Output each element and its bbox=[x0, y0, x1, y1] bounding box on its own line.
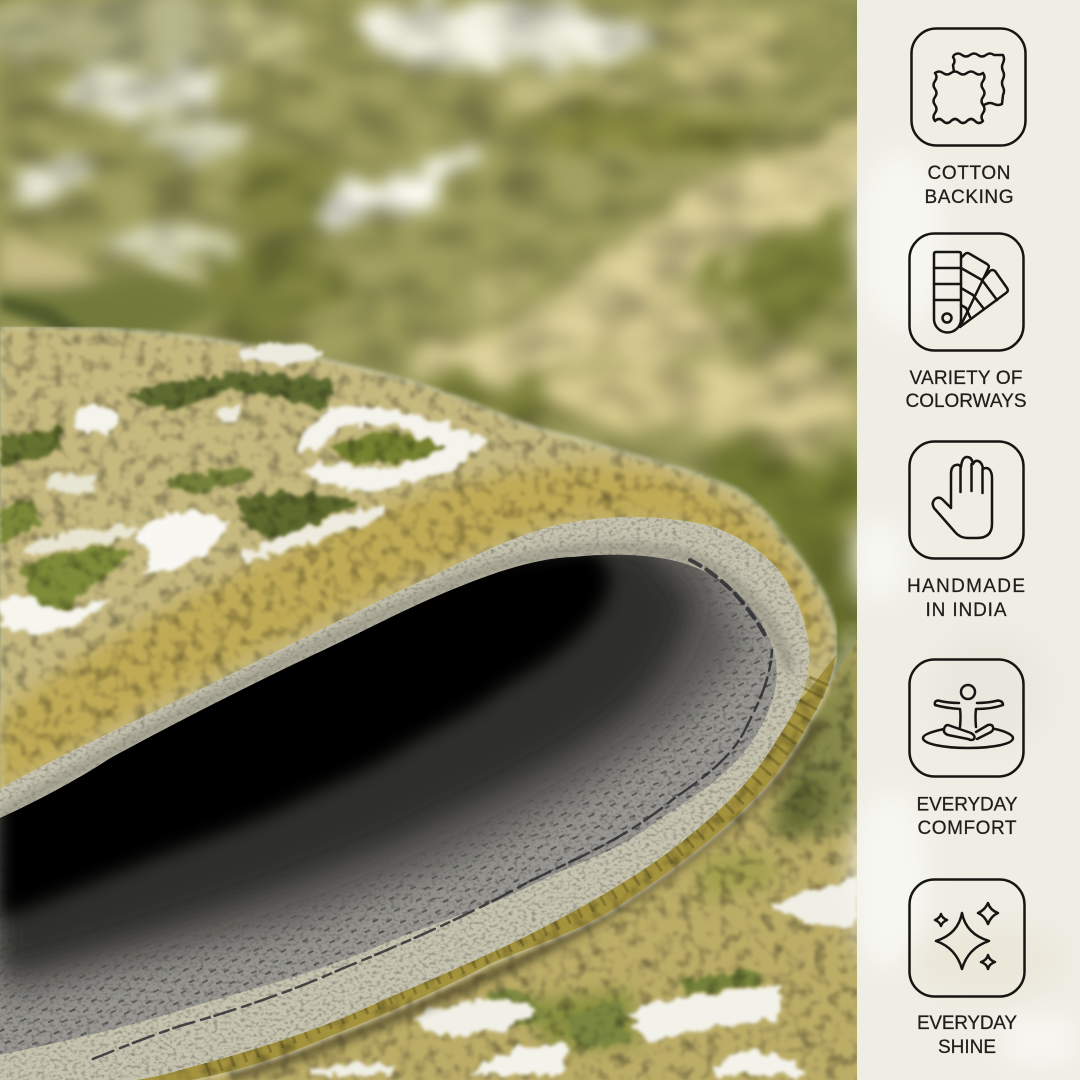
feature: variety of colorways bbox=[906, 234, 1026, 412]
feature: everyday comfort bbox=[910, 660, 1024, 839]
label: handmade in India: HANDMADE bbox=[907, 576, 1025, 597]
label: everyday shine: SHINE bbox=[938, 1037, 996, 1058]
feature: handmade in India bbox=[907, 442, 1025, 621]
label: handmade in India: IN INDIA bbox=[926, 600, 1007, 621]
white motif patches on roll bbox=[0, 343, 487, 635]
label: variety of colorways: COLORWAYS bbox=[906, 391, 1026, 412]
label: everyday shine bbox=[917, 1013, 1017, 1058]
label: handmade in India bbox=[907, 576, 1025, 621]
rug edge binding bbox=[0, 517, 809, 1080]
icon: sparkling stars bbox=[910, 880, 1024, 996]
feature: cotton backing bbox=[912, 28, 1026, 208]
shaded upper binding bbox=[0, 549, 790, 815]
panel: feature column background bbox=[855, 0, 1080, 1080]
dark weave fold in focus zone bbox=[0, 292, 84, 330]
label: cotton backing bbox=[924, 163, 1014, 208]
icon: raised hand bbox=[910, 442, 1024, 558]
hollow underside of the roll bbox=[0, 540, 800, 1080]
rug surface fading into focus bbox=[0, 229, 215, 336]
dark stitching along the binding bbox=[93, 560, 772, 1059]
label: everyday comfort bbox=[916, 794, 1018, 839]
label: cotton backing: COTTON bbox=[928, 163, 1010, 184]
lower rug surface below the roll bbox=[190, 620, 857, 1080]
label: variety of colorways bbox=[906, 368, 1026, 412]
rolled rug pile top surface bbox=[0, 327, 837, 1080]
shadow under the roll bbox=[230, 720, 820, 1076]
label: everyday comfort: EVERYDAY bbox=[916, 794, 1018, 816]
label: variety of colorways: VARIETY OF bbox=[910, 368, 1022, 389]
label: cotton backing: BACKING bbox=[924, 187, 1014, 208]
white motifs on lower rug bbox=[310, 878, 857, 1075]
icon: fabric swatches bbox=[912, 28, 1026, 146]
blurred rug background bbox=[0, 0, 857, 691]
label: everyday shine: EVERYDAY bbox=[917, 1013, 1017, 1034]
feature: everyday shine bbox=[910, 880, 1024, 1058]
green motif patches bbox=[0, 372, 450, 612]
icon: colour swatch fan bbox=[910, 234, 1024, 350]
label: everyday comfort: COMFORT bbox=[918, 818, 1017, 839]
icon: seated meditation figure bbox=[910, 660, 1024, 776]
